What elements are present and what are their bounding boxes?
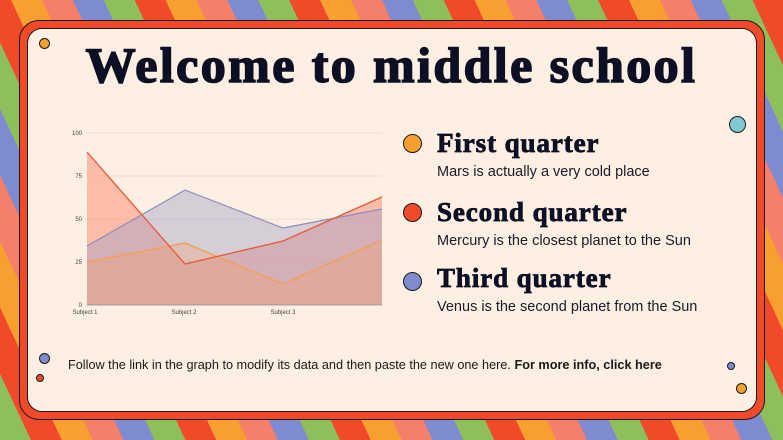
area chart: Subject 1: [72, 310, 98, 316]
area chart: [72, 130, 382, 316]
icon: decorative dot red left: [36, 374, 44, 382]
legend item: first quarter: [437, 128, 650, 180]
icon: decorative dot periwinkle right: [727, 362, 735, 370]
icon: orange dot: [403, 134, 422, 153]
legend item: third quarter: [437, 263, 697, 315]
area chart: 100: [72, 131, 83, 137]
icon: decorative dot blue: [729, 116, 746, 133]
legend item: second quarter: [437, 197, 691, 249]
icon: decorative dot orange: [39, 38, 50, 49]
title: Welcome to middle school: [86, 37, 697, 93]
area chart: 50: [75, 217, 83, 223]
area chart: 0: [79, 303, 83, 309]
footer text: Follow the link in the graph to modify its data and then paste the new one here. For more info, click here: [68, 358, 662, 372]
icon: red dot: [403, 203, 422, 222]
area chart: Subject 2: [171, 310, 197, 316]
legend item: third quarter: Venus is the second planet from the Sun: [437, 299, 697, 315]
area chart: 25: [75, 260, 83, 266]
area chart: 75: [75, 174, 83, 180]
icon: periwinkle dot: [403, 272, 422, 291]
legend item: first quarter: First quarter: [437, 128, 599, 158]
legend item: first quarter: Mars is actually a very cold place: [437, 164, 650, 180]
legend item: third quarter: Third quarter: [437, 263, 611, 293]
legend item: second quarter: Mercury is the closest planet to the Sun: [437, 233, 691, 249]
icon: decorative dot orange right: [736, 383, 747, 394]
icon: decorative dot periwinkle left: [39, 353, 50, 364]
legend item: second quarter: Second quarter: [437, 197, 627, 227]
area chart: Subject 3: [270, 310, 296, 316]
